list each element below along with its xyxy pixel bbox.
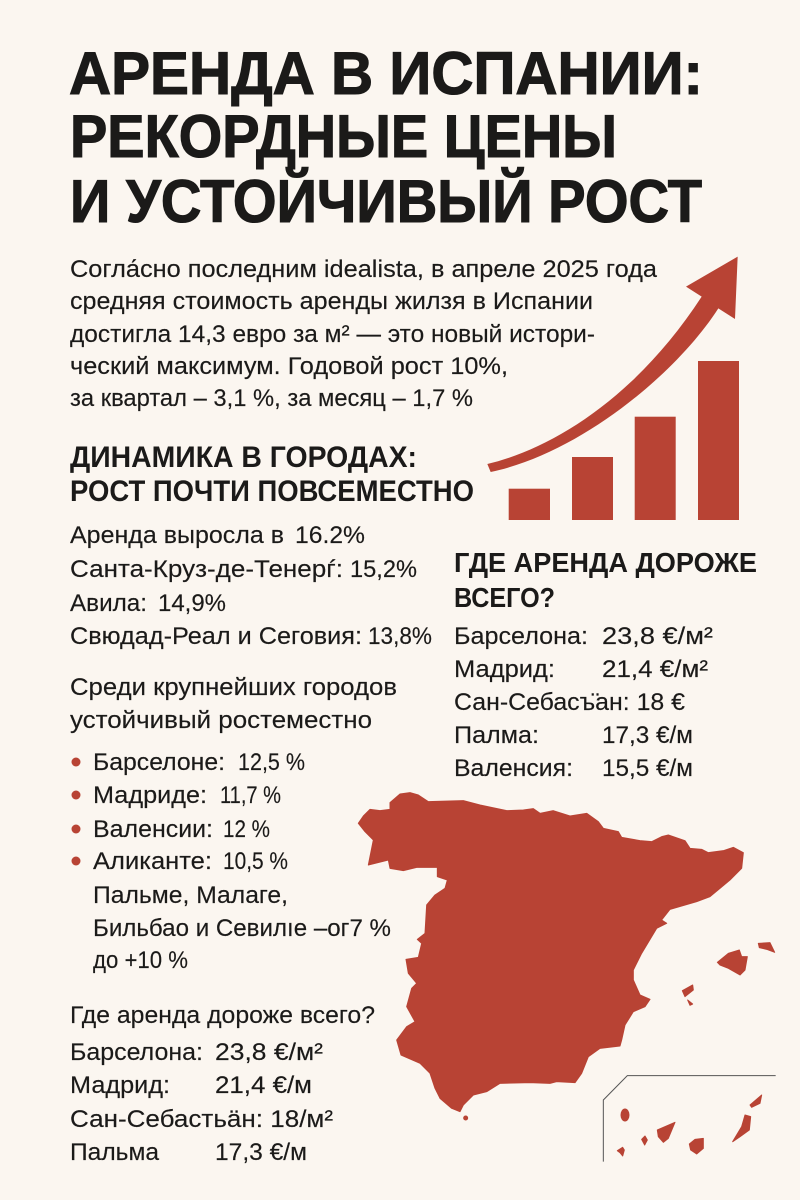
- intro text block: [70, 256, 658, 412]
- price list (bottom): Мадрид:: [70, 1072, 170, 1099]
- price list (bottom): 23,8 €/м²: [215, 1039, 323, 1066]
- price list (bottom): Барселона:: [70, 1039, 203, 1066]
- arrow: upward trend: [487, 257, 738, 472]
- price list (right): 23,8 €/м²: [602, 623, 713, 650]
- map of Spain: [358, 793, 776, 1162]
- text: largest cities intro: устойчивый ростеместно: [70, 707, 372, 734]
- heading: city dynamics: ДИНАМИКА В ГОРОДАХ:: [70, 441, 417, 474]
- text: largest cities intro: Среди крупнейших городов: [70, 674, 397, 701]
- heading: city dynamics: [70, 441, 474, 508]
- price list (right): Барселона:: [454, 623, 588, 650]
- price list (right): 21,4 €/м²: [602, 656, 708, 683]
- city growth list: Санта-Круз-де-Тенерѓ:: [70, 556, 343, 583]
- intro text block: ческий максимум. Годовой рост 10%,: [70, 353, 508, 380]
- price list (bottom): Сан-Себастьӓн: 18/м²: [70, 1106, 333, 1133]
- text: largest cities intro: [70, 674, 397, 734]
- city growth list: [70, 522, 432, 650]
- bullet list: largest cities: 12,5 %: [238, 749, 305, 776]
- bullet list: largest cities: Бильбао и Севилıе –ог7 %: [93, 915, 391, 942]
- price list (right): 17,3 €/м: [602, 722, 693, 749]
- bullet list: largest cities: Аликанте:: [93, 848, 212, 875]
- intro text block: средняя стоимость аренды жилзя в Испании: [70, 288, 593, 315]
- city growth list: Свюдад-Реал и Сеговия:: [70, 623, 362, 650]
- city growth list: Авила:: [70, 590, 147, 617]
- chart: growth bars with rising arrow: [487, 257, 739, 520]
- city growth list: 13,8%: [368, 623, 432, 650]
- bullet list: largest cities: 11,7 %: [220, 782, 281, 809]
- price list (bottom): 17,3 €/м: [215, 1139, 307, 1166]
- city growth list: 14,9%: [158, 590, 226, 617]
- heading: most expensive cities (right): [454, 547, 757, 613]
- price list (right): Сан-Себасъ̈ан: 18 €: [454, 689, 686, 716]
- bullet list: largest cities: 10,5 %: [223, 848, 288, 875]
- price list (right): Валенсия:: [454, 755, 573, 782]
- price list (bottom): 21,4 €/м: [215, 1072, 312, 1099]
- bullet list: largest cities: 12 %: [223, 816, 270, 843]
- subheading: most expensive cities (bottom): Где аренда дороже всего?: [70, 1002, 375, 1029]
- Balearic islands: [464, 943, 775, 1120]
- price list (bottom): [70, 1039, 333, 1166]
- inset frame: [603, 1076, 776, 1162]
- title: [69, 40, 703, 235]
- heading: most expensive cities (right): ГДЕ АРЕНДА ДОРОЖЕ: [454, 547, 757, 578]
- bullet list: largest cities: Валенсии:: [93, 816, 213, 843]
- city growth list: 15,2%: [350, 556, 417, 583]
- title: АРЕНДА В ИСПАНИИ:: [69, 40, 703, 107]
- bullet list: largest cities: до +10 %: [93, 947, 188, 974]
- bullet list: largest cities: Барселоне:: [93, 749, 225, 776]
- title: РЕКОРДНЫЕ ЦЕНЫ: [70, 103, 617, 170]
- intro text block: за квартал – 3,1 %, за месяц – 1,7 %: [70, 385, 473, 412]
- price list (right): Палма:: [454, 722, 539, 749]
- price list (right): [454, 623, 713, 782]
- mainland: [358, 793, 743, 1112]
- heading: city dynamics: РОСТ ПОЧТИ ПОВСЕМЕСТНО: [70, 475, 474, 508]
- title: И УСТОЙЧИВЫЙ РОСТ: [70, 168, 702, 235]
- intro text block: Согла́сно последним idealista, в апреле 2025 года: [70, 256, 658, 283]
- city growth list: Аренда выросла в: [70, 522, 284, 549]
- price list (right): 15,5 €/м: [602, 755, 693, 782]
- price list (bottom): Пальма: [70, 1139, 160, 1166]
- bullet list: largest cities: [72, 749, 391, 974]
- city growth list: 16.2%: [295, 522, 365, 549]
- intro text block: достигла 14,3 евро за м² — это новый истори-: [70, 321, 595, 348]
- Canary islands: [617, 1095, 762, 1156]
- bar chart: [509, 361, 739, 520]
- heading: most expensive cities (right): ВСЕГО?: [454, 582, 555, 613]
- bullet list: largest cities: Пальме, Малаге,: [93, 882, 288, 909]
- price list (right): Мадрид:: [454, 656, 555, 683]
- bullet list: largest cities: Мадриде:: [93, 782, 207, 809]
